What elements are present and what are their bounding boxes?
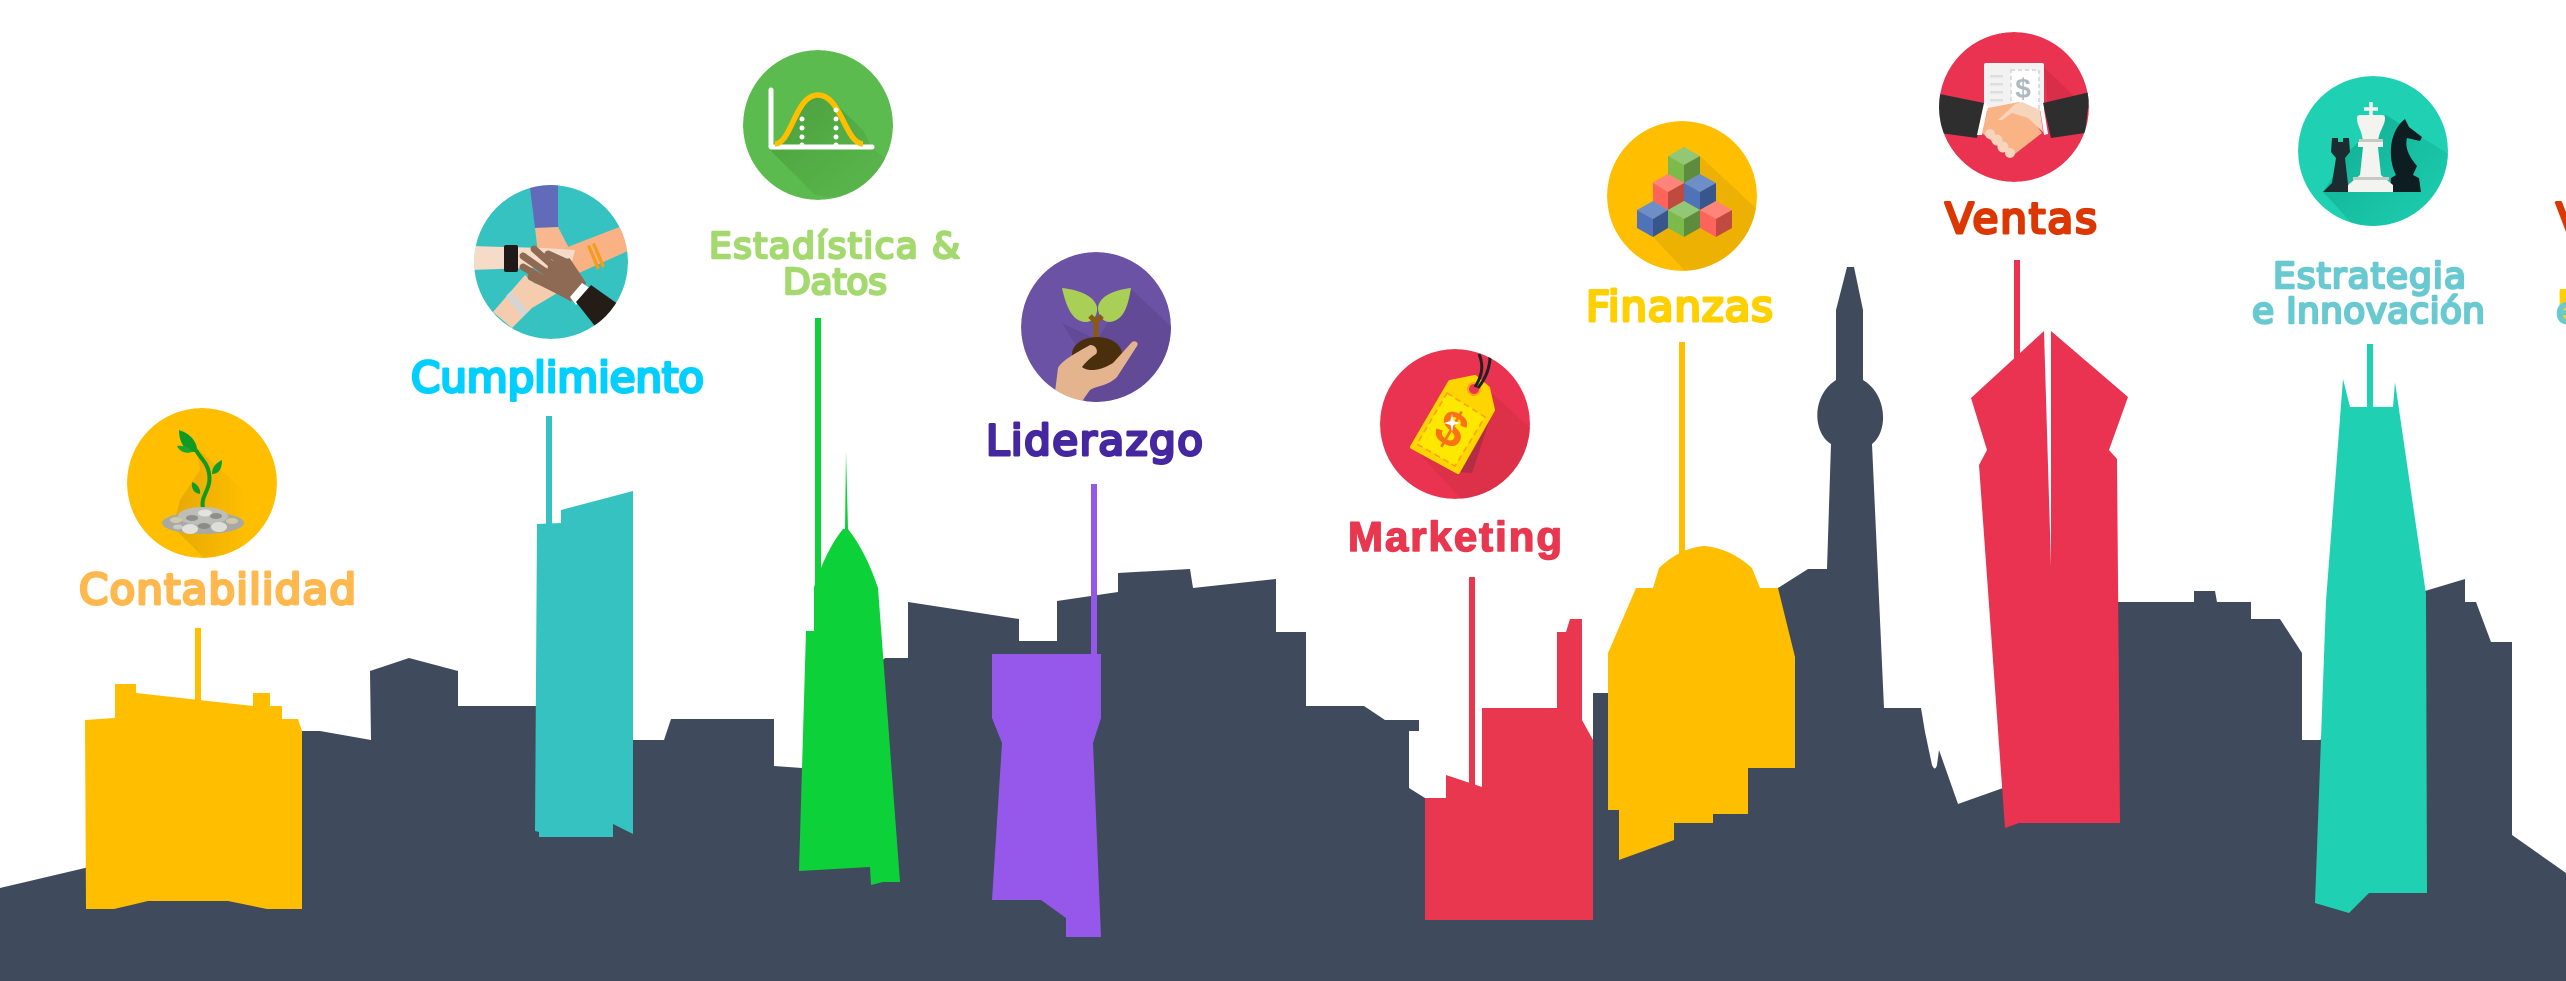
- label: Estrategia e Innovación: e Innovación: [2252, 291, 2485, 332]
- cube middle blue: [1684, 174, 1716, 210]
- label: Finanzas: Finanzas: [1586, 282, 1773, 331]
- panel: Estadística y Datos: [709, 50, 960, 885]
- connector pole: [546, 416, 552, 526]
- icon: hand holding a seedling: [1021, 252, 1171, 402]
- icon: bell curve chart: [743, 50, 900, 200]
- cube bottom blue: [1637, 201, 1668, 237]
- connector pole: [1679, 342, 1685, 558]
- building: [992, 654, 1101, 937]
- label: Estadística & Datos: Estadística &: [709, 226, 960, 267]
- cube bottom red: [1700, 201, 1732, 237]
- building: [1425, 619, 1593, 920]
- label: Liderazgo: Liderazgo: [986, 416, 1203, 465]
- label: Estadística & Datos: Datos: [783, 262, 887, 303]
- label: Ventas: Ventas: [1945, 194, 2097, 243]
- panel: Liderazgo: [986, 252, 1203, 937]
- cube bottom green: [1668, 201, 1700, 237]
- building: [85, 684, 302, 909]
- label: Estadística & Datos: [709, 226, 960, 303]
- panel: Marketing: [1348, 349, 1593, 920]
- icon: stacked hands: [470, 180, 630, 339]
- panel: Cumplimiento: [411, 180, 704, 837]
- icon: stacked cubes: [1607, 121, 1760, 275]
- label: Contabilidad: Contabilidad: [79, 565, 356, 614]
- label: Estrategia e Innovación: Estrategia: [2273, 256, 2466, 297]
- panel: Ventas: [1935, 32, 2128, 828]
- icon: handshake over a bill: [1935, 32, 2090, 182]
- icon: price tag: [1380, 349, 1535, 500]
- connector pole: [2367, 344, 2373, 409]
- connector pole: [815, 318, 821, 590]
- connector pole: [2014, 260, 2020, 362]
- cube top green: [1668, 147, 1700, 183]
- clipped labels at right edge: [2556, 194, 2566, 332]
- panel: Estrategia e Innovación: [2252, 76, 2485, 913]
- building: [1608, 546, 1795, 860]
- building: [799, 451, 900, 885]
- building: [2315, 379, 2427, 913]
- icon: sprout growing from coins: [127, 408, 277, 560]
- cube middle red: [1652, 174, 1684, 210]
- dark hand: [523, 249, 582, 297]
- connector pole: [1091, 484, 1097, 656]
- icon: chess pieces: [2298, 76, 2450, 232]
- icon: handshake over a bill: $: [2015, 73, 2031, 104]
- panel: Finanzas: [1586, 121, 1795, 860]
- skyline silhouette: [0, 267, 2566, 981]
- icon: price tag: $: [1425, 398, 1478, 460]
- panel: Contabilidad: [79, 408, 356, 909]
- connector pole: [1469, 577, 1475, 787]
- building: [535, 491, 633, 837]
- connector pole: [195, 628, 201, 702]
- label: Estrategia e Innovación: [2252, 256, 2485, 332]
- building: [1971, 331, 2128, 828]
- label: Marketing: Marketing: [1348, 513, 1562, 560]
- label: Cumplimiento: Cumplimiento: [411, 353, 704, 402]
